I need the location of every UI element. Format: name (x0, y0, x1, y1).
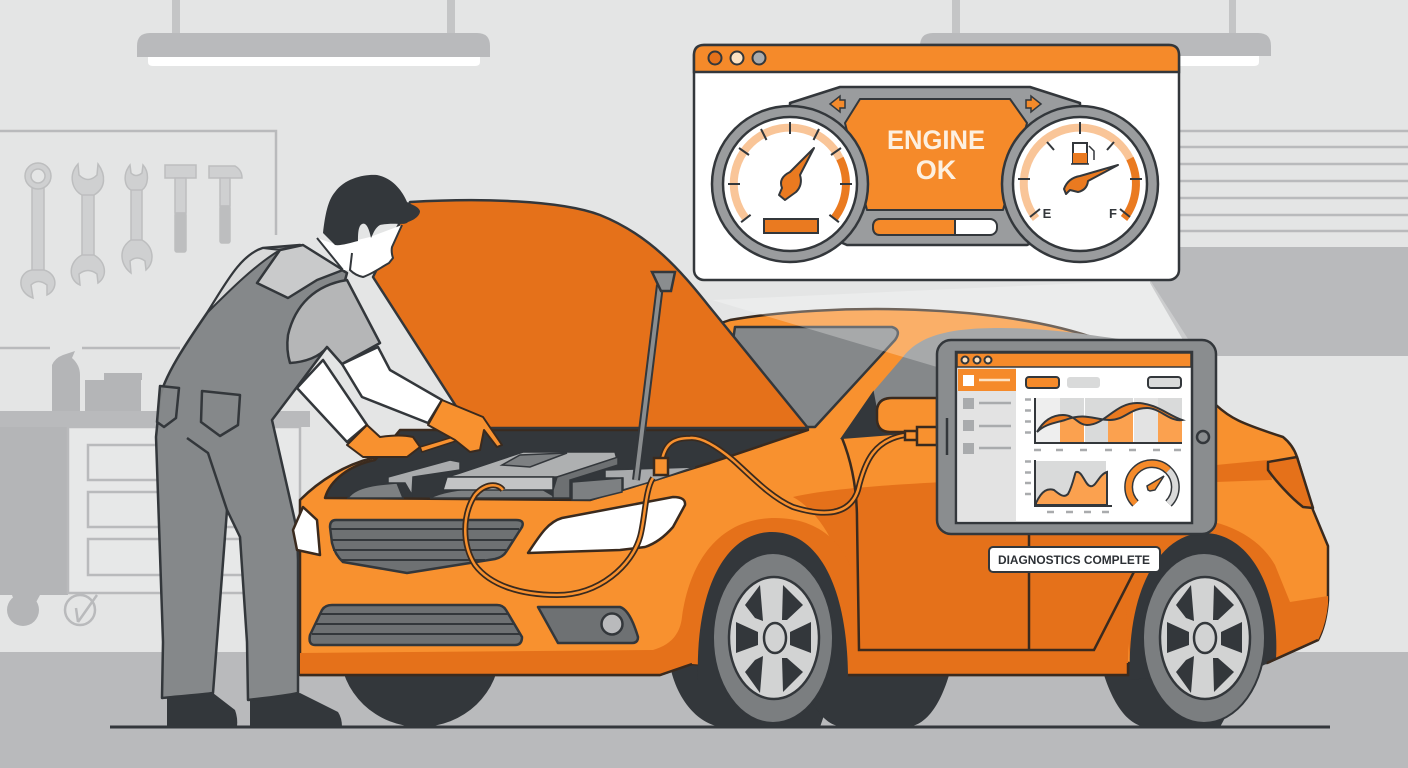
front grille (330, 520, 523, 573)
icon: small wrench (122, 165, 152, 273)
label E: E (1043, 206, 1052, 221)
right gauge (1002, 106, 1158, 262)
progress bar (873, 219, 997, 235)
hood (373, 200, 808, 428)
obd plug (654, 458, 668, 475)
overalls (156, 245, 347, 700)
engine status screen (845, 99, 1027, 210)
icon: open wrench (71, 164, 104, 285)
door lower panel (793, 480, 1216, 675)
area chart (1025, 460, 1112, 512)
left glove (347, 425, 420, 457)
rear wheel arch (1130, 533, 1276, 680)
side window (873, 328, 1140, 430)
line chart (1025, 398, 1182, 450)
hair (323, 175, 420, 245)
window frame (694, 45, 1179, 280)
workbench and cabinet (0, 351, 310, 626)
window dark triangle (842, 393, 905, 438)
icon: left arrow (830, 96, 845, 112)
mini gauge (1129, 464, 1175, 504)
icon: ring wrench (21, 163, 55, 298)
pockets (157, 386, 240, 436)
body bottom edge (300, 640, 1318, 675)
side mirror (877, 398, 937, 432)
rear arm (297, 360, 367, 442)
lower grille (310, 605, 522, 645)
cluster housing (790, 87, 1080, 245)
wall slats right (1180, 131, 1408, 231)
car (300, 200, 1328, 723)
icon: mallet (165, 165, 196, 252)
rear fender shade (1120, 518, 1328, 663)
window title bar (694, 45, 1179, 72)
shelf line (0, 347, 180, 349)
light beam (712, 280, 1190, 367)
car body shell (300, 309, 1328, 675)
tablet connector (905, 427, 937, 445)
toolbar buttons (1026, 377, 1181, 388)
windshield (720, 327, 898, 427)
door lines (842, 438, 1140, 650)
right glove (428, 400, 502, 452)
fog lamp (538, 607, 638, 643)
left headlight (293, 507, 320, 555)
engine parts (348, 452, 695, 500)
face and neck (317, 225, 402, 277)
ceiling lamp left (137, 0, 490, 66)
callout: diagnostics complete (989, 547, 1160, 572)
window buttons (708, 52, 766, 64)
icon: fuel pump (1071, 143, 1094, 164)
ceiling lamp right (920, 0, 1271, 66)
hood prop rod (636, 272, 675, 480)
engine status screen: OK (916, 155, 957, 185)
front wheel (713, 553, 833, 723)
far side wheels and tire backs (340, 573, 1262, 727)
mechanic (156, 175, 502, 727)
icon: right arrow (1026, 96, 1041, 112)
icon: hammer (209, 166, 242, 243)
lower diagnostic cable (465, 478, 653, 595)
front arm (342, 347, 442, 423)
shoes (167, 693, 342, 727)
label F: F (1109, 206, 1117, 221)
panel: dashboard window (694, 45, 1179, 280)
tablet body (937, 340, 1216, 534)
tablet screen (956, 352, 1192, 523)
headlight (528, 497, 685, 553)
back shirt sliver (207, 248, 280, 313)
leg crease (187, 438, 227, 510)
screen title bar (957, 353, 1191, 367)
callout: diagnostics complete: DIAGNOSTICS COMPLETE (998, 553, 1150, 567)
pegboard frame (0, 131, 276, 235)
floor (0, 652, 1408, 768)
left gauge (712, 106, 868, 262)
front wheel arch (698, 532, 848, 680)
wall band right (1150, 247, 1408, 356)
tools on pegboard (21, 163, 242, 298)
rear stripe (1216, 460, 1272, 482)
sleeve (287, 280, 380, 364)
tool in hand (420, 437, 456, 452)
engine status screen: ENGINE (887, 125, 985, 155)
tablet side details (947, 418, 1209, 455)
sidebar (958, 368, 1016, 521)
upper diagnostic cable (662, 435, 905, 513)
rear wheel (1143, 553, 1265, 723)
front bumper lower band (300, 518, 857, 675)
engine bay (325, 430, 808, 500)
ground line (110, 726, 1330, 728)
taillight (1268, 457, 1313, 508)
shirt collar patch (257, 245, 343, 298)
panel: diagnostic tablet (937, 340, 1216, 534)
